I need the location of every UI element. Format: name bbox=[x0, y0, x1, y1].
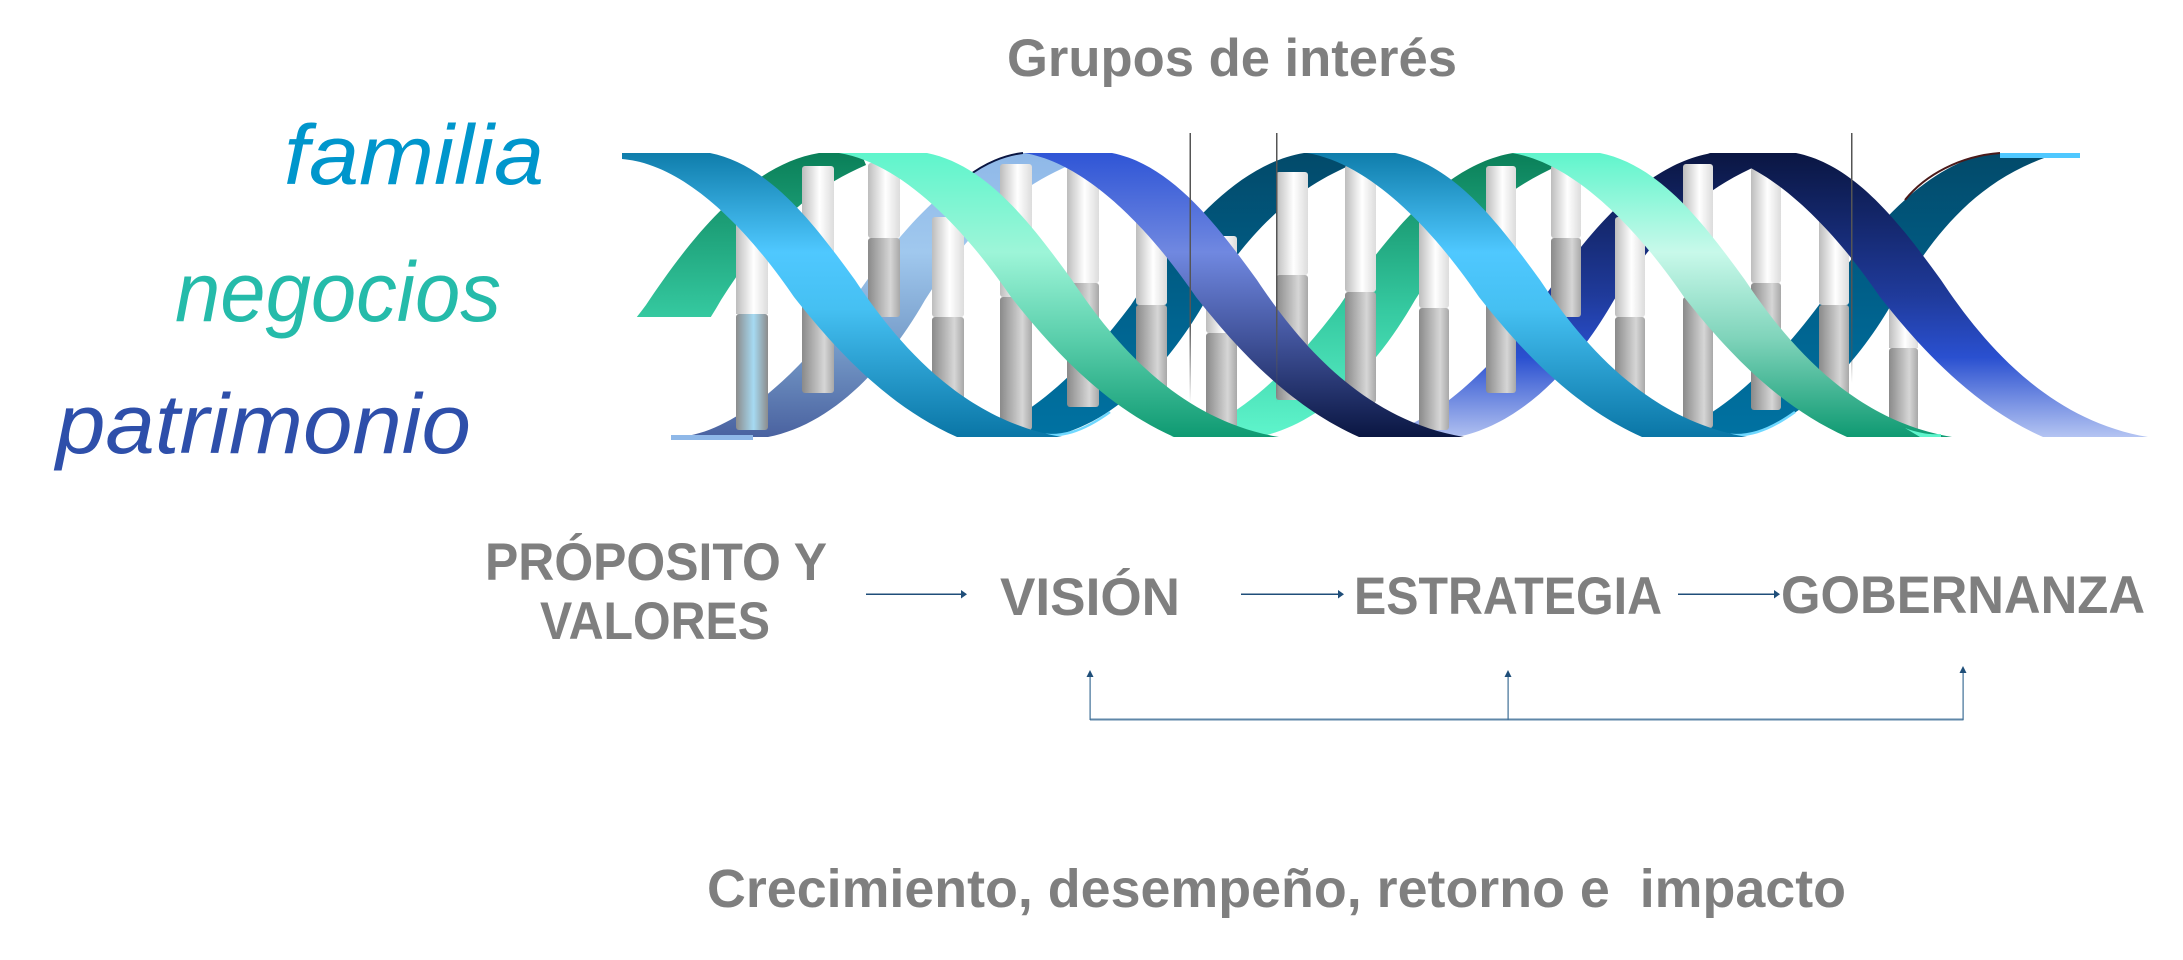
step: PRÓPOSITO Y VALORES bbox=[485, 532, 827, 651]
DNA helix illustration bbox=[476, 133, 2148, 440]
light rims under the front ribbons bbox=[1030, 412, 1795, 435]
step: PRÓPOSITO Y VALORES: PRÓPOSITO Y bbox=[485, 532, 827, 592]
step: GOBERNANZA: GOBERNANZA bbox=[1781, 566, 2145, 625]
label: patrimonio: patrimonio bbox=[53, 377, 471, 471]
label: familia: familia bbox=[284, 108, 544, 202]
label: negocios: negocios bbox=[175, 245, 501, 339]
back ribbons bbox=[476, 153, 2080, 440]
step: PRÓPOSITO Y VALORES: VALORES bbox=[540, 592, 770, 651]
cylinders bbox=[736, 163, 1918, 432]
thin vertical lines bbox=[1190, 133, 1852, 403]
front ribbons bbox=[622, 153, 2148, 437]
arrow: propósito to visión bbox=[866, 590, 967, 598]
step: ESTRATEGIA: ESTRATEGIA bbox=[1354, 567, 1662, 626]
arrow: visión to estrategia bbox=[1241, 590, 1344, 598]
feedback bracket with three up arrows bbox=[1086, 666, 1966, 720]
step: VISIÓN: VISIÓN bbox=[1000, 567, 1180, 627]
title: Grupos de interés: Grupos de interés bbox=[1007, 29, 1457, 88]
footer text: Crecimiento, desempeño, retorno e impacto bbox=[707, 859, 1846, 919]
arrow: estrategia to gobernanza bbox=[1678, 590, 1780, 598]
